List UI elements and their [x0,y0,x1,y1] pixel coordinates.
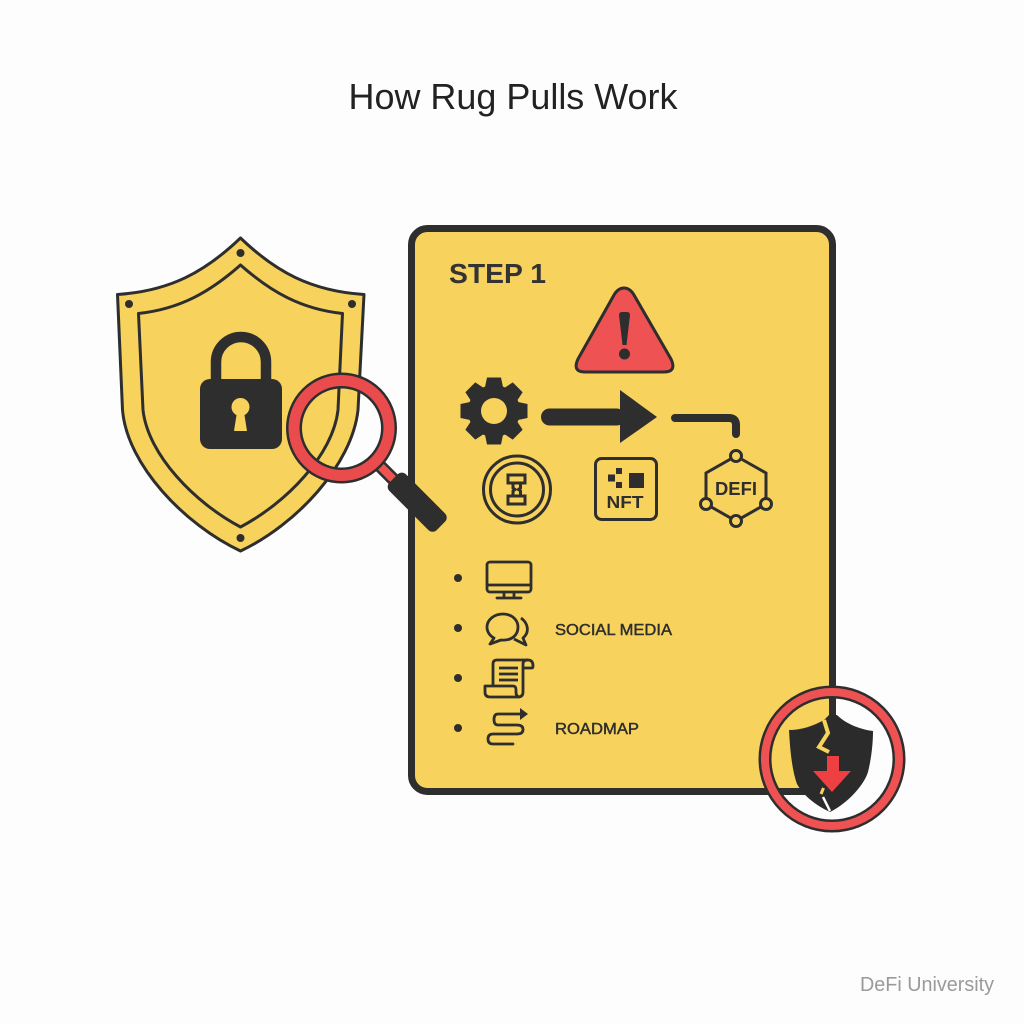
icon: token coin [484,456,550,523]
icon: NFT badge [596,458,656,520]
icon: NFT badge: NFT [606,492,644,512]
icon: broken shield badge [765,692,899,826]
label: roadmap: ROADMAP [555,721,639,738]
arrow: main process arrow [541,390,657,443]
watermark: DeFi University [860,974,994,996]
heading: step 1: STEP 1 [449,258,546,289]
title: How Rug Pulls Work [348,76,678,117]
list: bullet points [454,574,462,732]
icon: DeFi network hexagon: DEFI [715,479,757,499]
arrow: elbow connector [675,418,736,434]
icon: DeFi network hexagon [700,450,772,526]
icon: magnifying glass [294,380,449,534]
broken shield [789,715,873,812]
icon: security shield with padlock [118,238,364,551]
icon: padlock [200,337,282,449]
icon: winding roadmap path [488,708,528,744]
icon: warning triangle [576,288,673,372]
icon: scroll document [485,660,533,697]
rivets [125,249,356,542]
icon: gear [460,378,528,444]
panel: step 1 card [412,228,832,792]
label: social media: SOCIAL MEDIA [555,622,673,639]
icon: monitor [487,562,531,598]
icon: chat bubbles [487,614,527,645]
